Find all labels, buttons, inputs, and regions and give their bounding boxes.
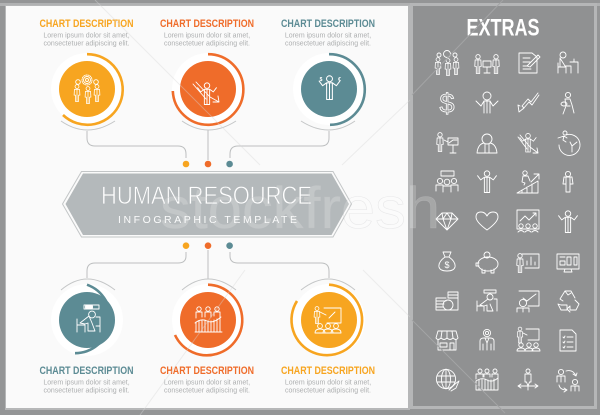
dots: top: [183, 161, 233, 167]
icon: declining graph: [518, 93, 539, 112]
description: Lorem ipsum dolor sit amet,: [164, 32, 250, 40]
halo: [51, 53, 123, 125]
icon: business person with currency: $: [320, 77, 323, 83]
block: top center: [160, 18, 254, 130]
ring: [75, 285, 110, 353]
icon: globe with hand: [436, 369, 459, 391]
panel: main infographic: [5, 5, 410, 410]
ring: [63, 54, 123, 125]
icon: piggy bank: [476, 252, 498, 273]
description: Lorem ipsum dolor sit amet,: [43, 32, 130, 40]
icon: business person with currency: [319, 76, 341, 100]
halo: [172, 284, 244, 356]
heading: CHART DESCRIPTION: [281, 365, 375, 377]
icon: falling business: [518, 133, 538, 153]
description: consectetuer adipiscing elit.: [285, 388, 371, 394]
banner title: HUMAN RESOURCE: [101, 182, 312, 210]
panel: extras: [412, 4, 596, 408]
icon: document and pencil: [519, 53, 540, 73]
icon: coin stacks: [436, 292, 458, 310]
description: Lorem ipsum dolor sit amet,: [285, 380, 371, 386]
icon: shop: [436, 331, 458, 350]
icon: team with gear: [74, 75, 100, 104]
halo: [172, 53, 244, 125]
icon: presenter and audience: [517, 327, 540, 351]
disc: [301, 292, 357, 348]
icon: heart: [476, 212, 498, 230]
heading: CHART DESCRIPTION: [40, 18, 134, 30]
under arc: [182, 121, 236, 130]
icon: tired worker: [477, 290, 497, 311]
icon: dollar sign: $: [439, 88, 455, 118]
ring: [329, 54, 365, 125]
icon: walking person with bag: [561, 92, 574, 114]
block: bottom right: [281, 279, 375, 394]
icon: monitor dashboard: [557, 254, 579, 272]
block: top left: [40, 18, 134, 130]
icon: arms raised person: [478, 171, 496, 192]
icon: meeting: [475, 55, 499, 74]
block: bottom left: [40, 279, 134, 394]
heading: CHART DESCRIPTION: [40, 365, 134, 377]
description: consectetuer adipiscing elit.: [44, 388, 130, 394]
description: consectetuer adipiscing elit.: [164, 388, 250, 394]
ring: [173, 54, 243, 125]
description: consectetuer adipiscing elit.: [164, 40, 250, 48]
icon: tired worker: [77, 305, 100, 332]
icon: stressed employee: [480, 329, 494, 350]
icon: person at desk: [558, 52, 578, 73]
center banner: [62, 172, 352, 237]
icon: money bag: $: [444, 260, 450, 270]
connectors: top: [87, 130, 329, 160]
icon: presenter and board: [437, 133, 458, 153]
under arc: [61, 121, 115, 130]
outer top band: [0, 3, 600, 6]
disc: [301, 61, 357, 117]
heading: CHART DESCRIPTION: [160, 365, 254, 377]
under arc: [301, 121, 355, 130]
icon: checklist: [560, 330, 576, 351]
disc: [59, 61, 115, 117]
icon: shrugging person: [476, 92, 498, 113]
description: consectetuer adipiscing elit.: [44, 40, 130, 48]
disc: [59, 292, 115, 348]
ring: [291, 285, 362, 355]
heading: CHART DESCRIPTION: [281, 18, 375, 30]
watermark: stockfresh: [160, 176, 440, 241]
connectors: bottom: [87, 250, 329, 279]
icon: person with currency: [559, 211, 577, 232]
icon: growth presentation: [517, 210, 539, 232]
icon: falling business: [193, 82, 219, 104]
heading: CHART DESCRIPTION: [160, 18, 254, 30]
halo: [293, 284, 365, 356]
under arc: [61, 279, 115, 290]
icon: running around a clock: [558, 131, 580, 155]
icon: business person with currency: €: [338, 77, 341, 83]
icon: money bag: [439, 252, 455, 271]
description: Lorem ipsum dolor sit amet,: [164, 380, 250, 386]
icon: presenter and bar chart: [517, 254, 539, 272]
icon: diamond: [436, 213, 458, 230]
icon: team over bar chart: [195, 307, 222, 332]
icon: recycling: [558, 291, 579, 312]
description: Lorem ipsum dolor sit amet,: [43, 380, 130, 386]
under arc: [182, 279, 236, 290]
description: consectetuer adipiscing elit.: [285, 40, 371, 48]
extras heading: EXTRAS: [466, 14, 540, 42]
banner subtitle: INFOGRAPHIC TEMPLATE: [118, 214, 297, 226]
block: top right: [281, 18, 375, 130]
icon: person and growth screen: [517, 291, 539, 312]
ring: [175, 285, 242, 355]
icon: team with speech bubble: [436, 171, 458, 192]
icon: people exchange: [557, 369, 579, 392]
icon: standing person: [563, 171, 573, 192]
disc: [180, 292, 236, 348]
icon: team over bar chart: [476, 369, 498, 390]
icon: person and direction arrows: [518, 369, 538, 390]
watermark: [95, 0, 505, 415]
under arc: [301, 279, 355, 290]
description: Lorem ipsum dolor sit amet,: [285, 32, 371, 40]
icon: bust person: [477, 134, 497, 153]
icon: runner and growth chart: [517, 171, 539, 193]
disc: [180, 61, 236, 117]
halo: [293, 53, 365, 125]
icon: team with gear: [435, 50, 459, 76]
halo: [51, 284, 123, 356]
icon: presenter and audience: [314, 307, 341, 333]
block: bottom center: [160, 279, 254, 394]
dots: bottom: [183, 242, 233, 249]
